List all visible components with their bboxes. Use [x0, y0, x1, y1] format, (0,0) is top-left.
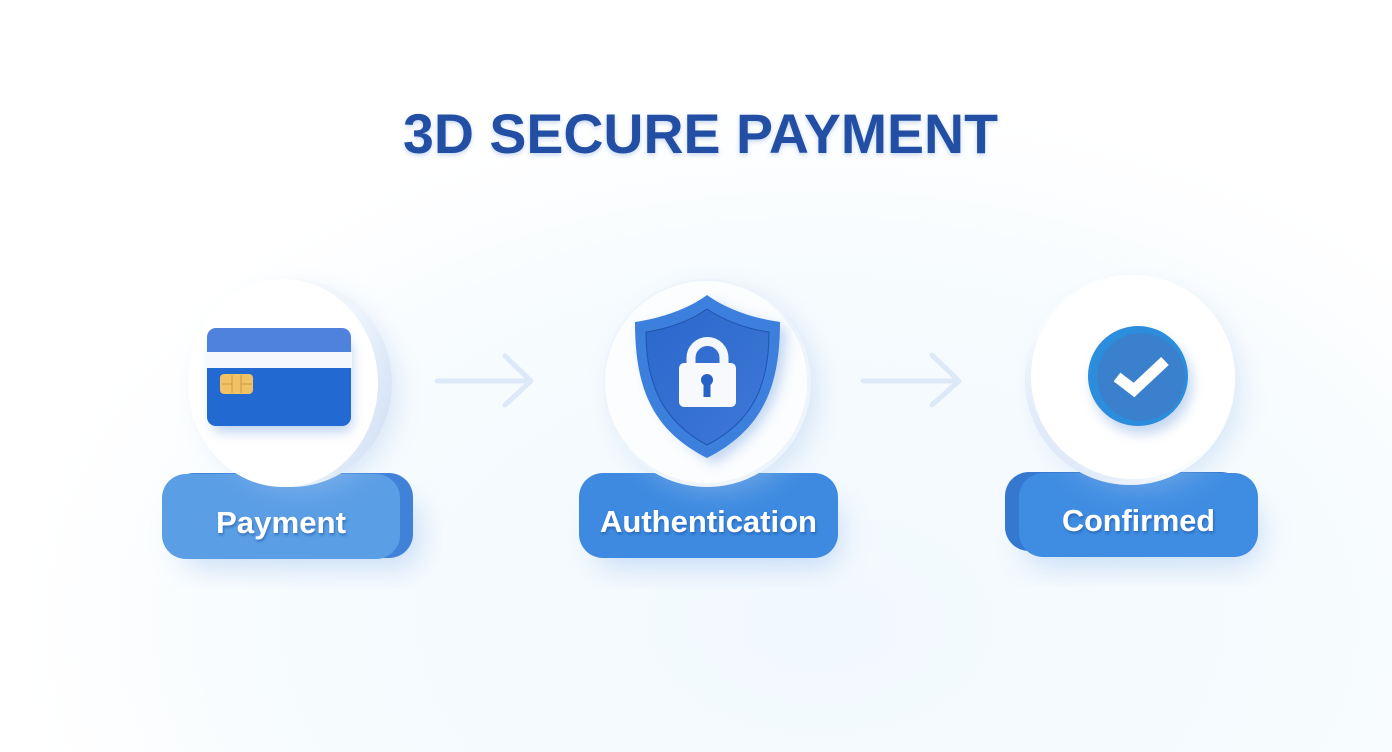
icon: padlock: [679, 342, 736, 407]
label button: confirmed: [1005, 472, 1258, 557]
pill shadow: authentication: [595, 500, 840, 568]
label button: payment: Payment: [216, 505, 346, 540]
label button: authentication: Authentication: [600, 504, 817, 539]
step 2: authentication: [579, 279, 840, 568]
icon: shield with lock: [635, 295, 786, 464]
title: 3D SECURE PAYMENT: [403, 102, 998, 165]
label button: payment: [162, 473, 413, 559]
disc: authentication: [603, 279, 816, 492]
arrow 2: [863, 355, 959, 405]
disc: payment: [188, 279, 395, 490]
icon: card chip: [220, 374, 253, 394]
step 3: confirmed: [1005, 275, 1260, 566]
pill shadow: confirmed: [1025, 500, 1260, 566]
pill shadow: payment: [180, 500, 420, 568]
icon: check badge: [1088, 326, 1192, 434]
label button: confirmed: Confirmed: [1062, 503, 1215, 538]
label button: authentication: [579, 473, 838, 558]
arrow 1: [437, 356, 531, 405]
icon: credit card: [207, 328, 352, 432]
step 1: payment: [162, 279, 420, 568]
disc: confirmed: [1025, 275, 1240, 490]
